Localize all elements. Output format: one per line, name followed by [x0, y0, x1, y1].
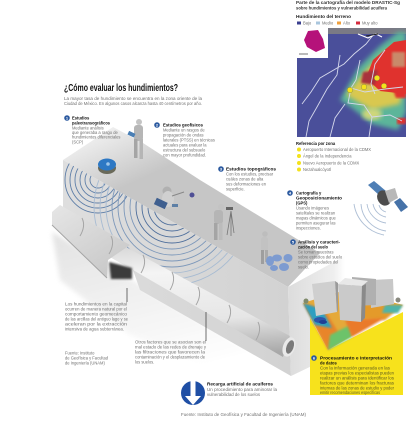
step 2 text: 2 — [156, 122, 159, 128]
text: damage explanation: las filtraciones que favorecen la — [135, 350, 206, 354]
leader line: damage text — [205, 312, 207, 341]
recharge text: vulnerabilidad de los suelos — [207, 392, 260, 397]
step 1 text: que generaba a rasgo de — [72, 130, 118, 135]
step 5 text: como propiedades del — [298, 260, 338, 264]
figure: technician with soil samples — [261, 231, 268, 264]
text: cause of subsidence: Los hundimientos en la capital — [65, 302, 127, 306]
intro text: La mayor tasa de hundimiento se encuentra en la zona oriente de la — [64, 96, 203, 101]
map heading: sobre hundimientos y vulnerabilidad acuífera — [296, 6, 388, 10]
text: source note: de Geofísica y Facultad — [65, 356, 109, 360]
icon: blue sensor — [98, 158, 116, 174]
step 4 text — [287, 190, 343, 230]
step 1 text: (SCP) — [72, 140, 84, 144]
step 4 text: permiten asegurar las — [296, 220, 336, 226]
block ground shadow — [52, 232, 285, 380]
step 3 text — [218, 166, 277, 192]
buildings — [304, 277, 400, 324]
step 1 text — [64, 115, 120, 144]
step 5 text — [290, 239, 343, 270]
block front face — [63, 160, 291, 376]
block right face — [288, 256, 345, 376]
map heading: Hundimiento del terreno — [296, 14, 352, 19]
figure: technician 1 — [127, 119, 143, 159]
step 3 text: sus deformaciones en — [226, 182, 267, 186]
icon: aquifer recharge arrow — [181, 381, 205, 405]
recharge text: Un procedimiento para aminorar la — [207, 387, 278, 392]
step 4 text: Cartografía y — [296, 190, 322, 196]
step 3 text: Estudios topográficos — [226, 166, 277, 172]
step 1 text: Mediante análisis — [72, 126, 104, 130]
step 3 text: 3 — [220, 166, 223, 172]
step 6 text: realizar un análisis para identificar los — [320, 376, 394, 380]
step 4 text: satelitales se realizan — [296, 210, 336, 216]
map references — [296, 141, 371, 172]
figure: crouching technician — [154, 186, 194, 209]
step 6 text: Con la información generada en las — [320, 366, 390, 370]
map references: Nuevo Aeropuerto de la CDMX — [303, 160, 359, 166]
map pins — [347, 75, 387, 93]
icon: satellite with signal waves — [354, 181, 408, 235]
step 5 text: zación del suelo — [298, 244, 328, 250]
source line: Fuente: Instituto de Geofísica y Facultad de Ingeniería (UNAM) — [181, 412, 307, 417]
intro text — [64, 96, 203, 106]
step 6 text: 6 — [313, 356, 316, 360]
pipe — [52, 205, 298, 358]
yellow panel background — [310, 312, 403, 395]
step 4 text: inspecciones. — [296, 226, 321, 230]
map references: Ángel de la Independencia — [303, 154, 352, 158]
step 2 text: laterales (PTSS) en técnicas — [163, 138, 215, 142]
map heading: Parte de la cartografía del modelo DRASTIC-Sg — [296, 0, 401, 5]
text: cause of subsidence: ocurren de manera natural por el — [65, 306, 127, 312]
leader line: fracture text — [126, 288, 128, 302]
step 2 text: propagación de ondas — [163, 132, 204, 138]
recharge text — [207, 382, 278, 397]
text: cause of subsidence: comportamiento geomecánico — [65, 312, 128, 316]
step 3 text: Con los estudios, precisar — [226, 172, 274, 176]
map legend: Muy alto — [362, 20, 378, 26]
map references: Aeropuerto Internacional de la CDMX — [303, 147, 371, 152]
text: source note: de Ingeniería (UNAM) — [65, 360, 105, 366]
text: source note — [65, 350, 109, 366]
map — [297, 28, 406, 137]
panel: data processing — [303, 277, 403, 395]
text: damage explanation: contaminación y el desplazamiento de — [135, 354, 206, 360]
map references: Nezahualcóyotl — [303, 167, 331, 172]
map legend: Bajo — [303, 20, 312, 26]
step 1 text: hundimientos diferenciales — [72, 134, 120, 140]
text: cause of subsidence: de las arcillas del antiguo lago y se — [65, 316, 129, 322]
step 6 text: factores que determinan los fracturas — [320, 380, 394, 386]
map legend: Alto — [343, 20, 351, 26]
text: damage explanation: Otros factores que se asocian son el — [135, 340, 206, 344]
step 4 text: Usando imágenes — [296, 206, 329, 210]
step 5 text: Análisis y caracteri- — [298, 240, 341, 244]
geological block illustration — [52, 127, 345, 380]
step 2 text — [154, 122, 215, 158]
step 2 text: Mediante un rasgos de — [163, 128, 205, 132]
step 5 text: 5 — [292, 240, 295, 244]
text: damage explanation — [135, 340, 207, 364]
map inset — [297, 28, 328, 58]
seismic waves — [64, 164, 233, 283]
map legend — [297, 20, 378, 26]
step 6 text: de datos — [320, 360, 338, 366]
map references: Referencia por zona — [296, 141, 336, 146]
step 1 text: paleotransográficos — [72, 120, 111, 126]
step 6 text — [311, 355, 395, 395]
map legend: Medio — [322, 20, 334, 26]
step 3 text: superficie. — [226, 186, 245, 192]
step 5 text: suelo. — [298, 264, 309, 270]
step 2 text: Estudios geofísicos — [163, 122, 204, 128]
block top face — [63, 127, 320, 287]
step 2 text: estructura del subsuelo — [163, 148, 206, 152]
figure: surveyor with tripod — [214, 204, 234, 240]
text: damage explanation: los suelos. — [135, 360, 154, 364]
recharge text: Recarga artificial de acuíferos — [207, 382, 274, 386]
soil heat model — [303, 290, 403, 350]
step 6 text: emitir recomendaciones específicas — [320, 390, 380, 395]
step 1 text: Estudios — [72, 116, 90, 120]
step 5 text: sobre estudios del suelo — [298, 254, 343, 260]
step 2 text: con mayor profundidad. — [163, 152, 206, 158]
text: cause of subsidence: intensiva de agua subterránea. — [65, 326, 124, 332]
text: cause of subsidence: aceleran por la extracción — [65, 322, 128, 326]
intro text: Ciudad de México. En algunos casos alcanza hasta 40 centímetros por año. — [64, 101, 202, 106]
step 6 text: etapas previas los especialistas pueden — [320, 370, 395, 376]
step 3 text: cuáles zonas de alta — [226, 176, 264, 182]
map heading — [296, 0, 401, 19]
step 6 text: internas de las zonas de estudio y poder — [320, 386, 395, 390]
title: ¿Cómo evaluar los hundimientos? — [64, 82, 178, 94]
step 2 text: actuales para evaluar la — [163, 142, 207, 148]
text: damage explanation: mal estado de las redes de drenaje y — [135, 344, 207, 350]
step 4 text: (GPS) — [296, 200, 308, 206]
step 4 text: 4 — [289, 190, 292, 196]
step 6 text: Procesamiento e interpretación — [320, 356, 393, 360]
text: cause of subsidence — [65, 302, 129, 332]
icon: blue soil sample bags — [266, 254, 292, 271]
step 4 text: Geoposicionamiento — [296, 196, 343, 200]
step 1 text: 1 — [66, 116, 69, 120]
step 4 text: mapas dinámicos que — [296, 216, 337, 220]
text: source note: Fuente: Instituto — [65, 350, 95, 356]
step 5 text: Se toman muestras — [298, 250, 334, 254]
